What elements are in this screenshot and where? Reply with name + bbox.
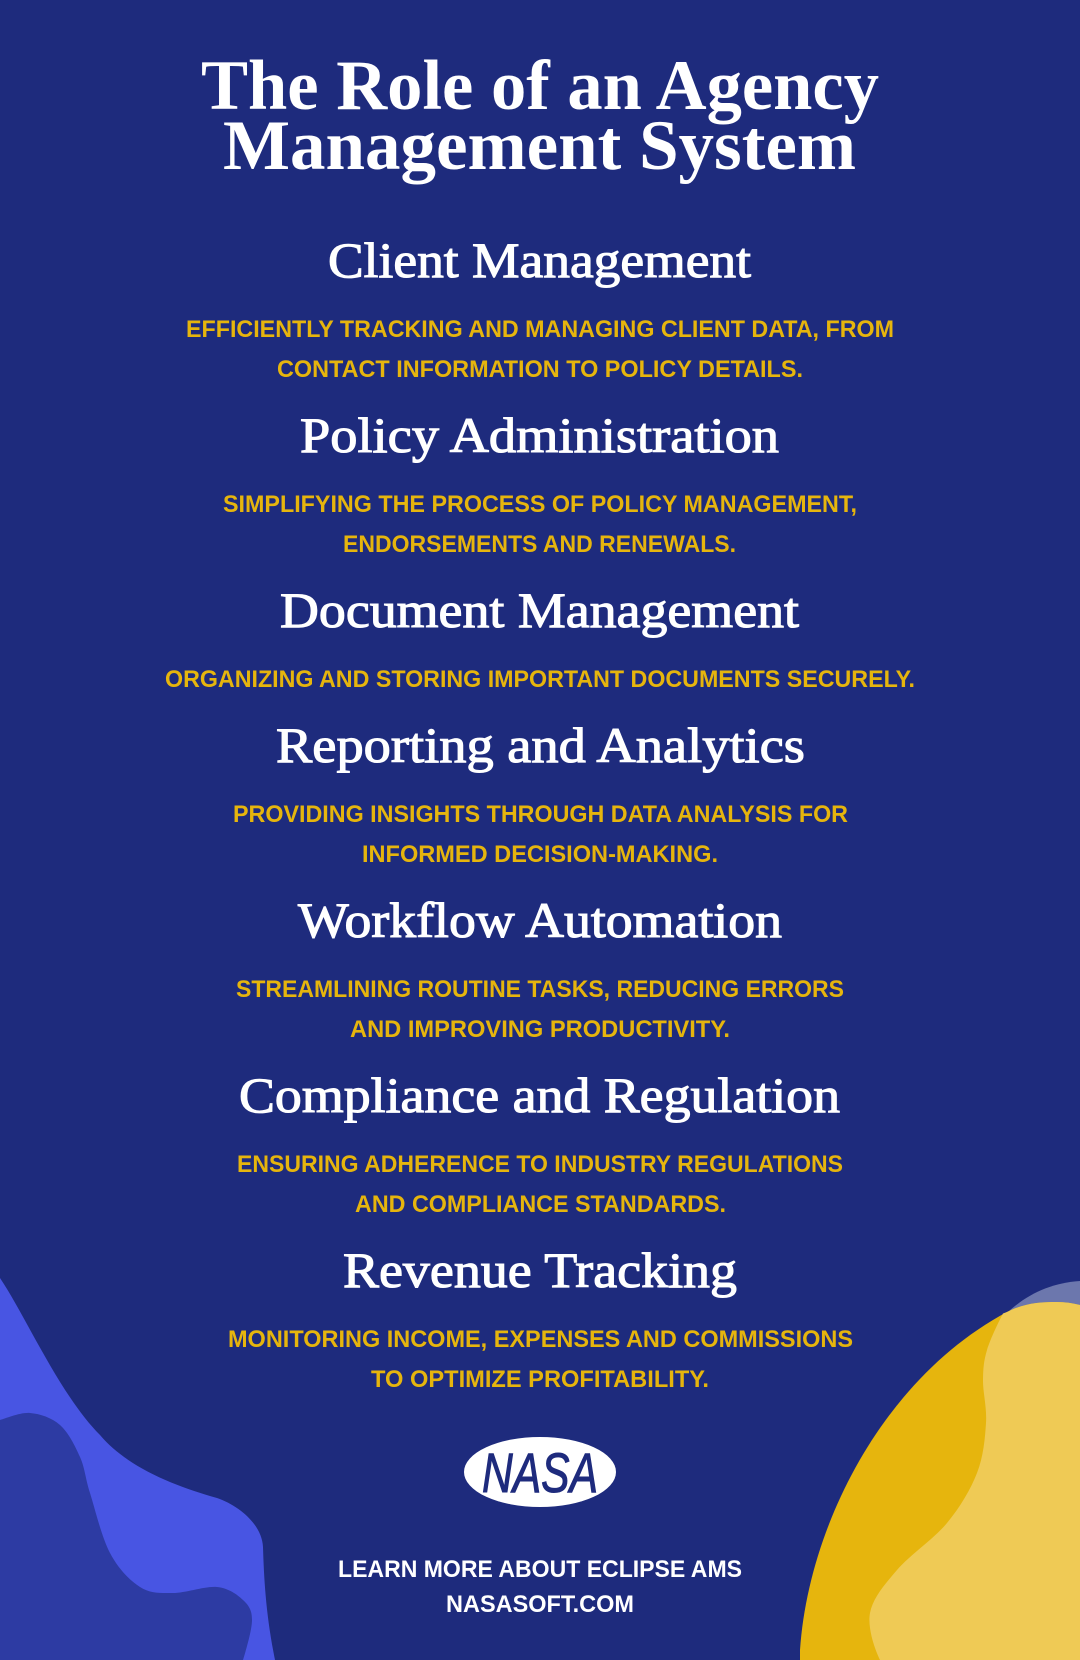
panel: policy administration: Policy Administration (300, 407, 779, 463)
call to action (338, 1556, 742, 1618)
panel: client management: EFFICIENTLY TRACKING AND MANAGING CLIENT DATA, FROM (186, 316, 894, 343)
call to action: NASASOFT.COM (446, 1591, 634, 1618)
decorative blue blob bottom left (0, 1278, 275, 1660)
panel: workflow automation: AND IMPROVING PRODUCTIVITY. (350, 1016, 730, 1043)
panel: client management: CONTACT INFORMATION TO POLICY DETAILS. (277, 356, 803, 383)
panel: compliance and regulation: AND COMPLIANCE STANDARDS. (355, 1191, 726, 1218)
panel: workflow automation (236, 892, 844, 1043)
title: Management System (223, 107, 856, 185)
panel: document management (165, 582, 915, 693)
panel: revenue tracking: MONITORING INCOME, EXPENSES AND COMMISSIONS (228, 1326, 853, 1353)
title: The Role of an Agency (201, 47, 879, 125)
panel: revenue tracking: TO OPTIMIZE PROFITABILITY. (371, 1366, 709, 1393)
panel: reporting and analytics: PROVIDING INSIGHTS THROUGH DATA ANALYSIS FOR (233, 801, 848, 828)
decorative yellow blob bottom right (800, 1281, 1080, 1660)
panel: reporting and analytics: Reporting and Analytics (276, 717, 805, 773)
panel: reporting and analytics (233, 717, 848, 868)
panel: revenue tracking: Revenue Tracking (343, 1242, 737, 1298)
panel: compliance and regulation (237, 1067, 843, 1218)
panel: client management: Client Management (328, 232, 751, 288)
panel: compliance and regulation: ENSURING ADHERENCE TO INDUSTRY REGULATIONS (237, 1151, 843, 1178)
panel: document management: ORGANIZING AND STORING IMPORTANT DOCUMENTS SECURELY. (165, 666, 915, 693)
panel: compliance and regulation: Compliance and Regulation (239, 1067, 840, 1123)
panel: client management (186, 232, 894, 383)
panel: reporting and analytics: INFORMED DECISION-MAKING. (362, 841, 718, 868)
panel: policy administration (223, 407, 857, 558)
panel: revenue tracking (228, 1242, 853, 1393)
panel: document management: Document Management (280, 582, 799, 638)
panel: workflow automation: STREAMLINING ROUTINE TASKS, REDUCING ERRORS (236, 976, 844, 1003)
panel: workflow automation: Workflow Automation (298, 892, 782, 948)
logo: NASA oval: NASA (482, 1441, 598, 1504)
panel: policy administration: ENDORSEMENTS AND RENEWALS. (343, 531, 736, 558)
panel: policy administration: SIMPLIFYING THE PROCESS OF POLICY MANAGEMENT, (223, 491, 857, 518)
title (201, 47, 879, 185)
call to action: LEARN MORE ABOUT ECLIPSE AMS (338, 1556, 742, 1583)
